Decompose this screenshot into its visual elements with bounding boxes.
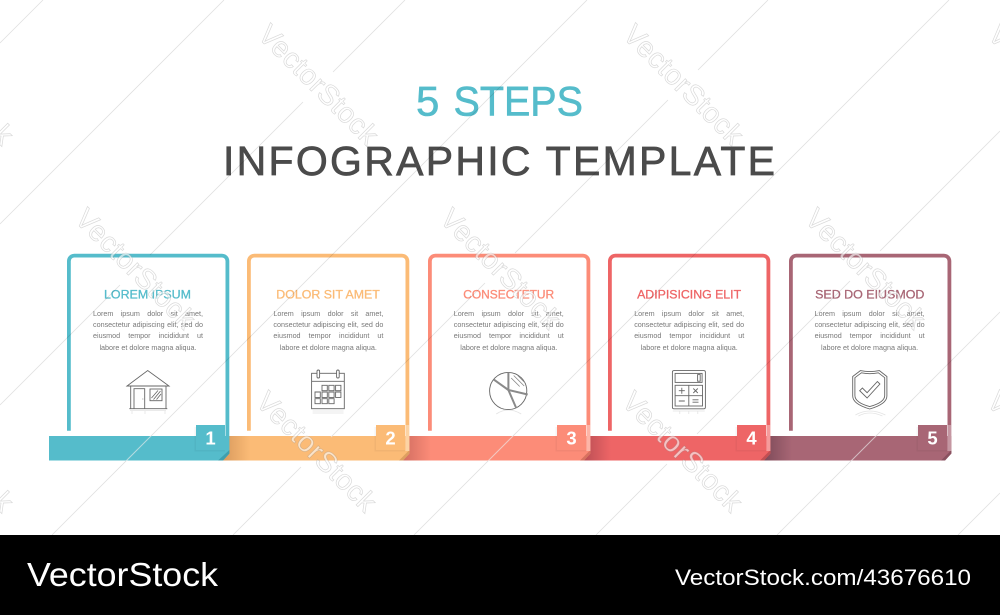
body text 4: Lorem ipsum dolor sit amet, xyxy=(634,309,744,318)
icon: shield with check xyxy=(852,371,886,416)
title line: infographic template: INFOGRAPHIC TEMPLATE xyxy=(223,138,775,184)
icon: calendar xyxy=(312,370,345,413)
heading 4: ADIPISICING ELIT xyxy=(637,288,742,302)
heading 1: LOREM IPSUM xyxy=(104,288,191,302)
ribbon band 4 xyxy=(583,436,771,460)
number badge 5: 5 xyxy=(927,427,937,448)
body text 5 xyxy=(814,309,925,352)
panel: step 3 consectetur xyxy=(403,254,590,460)
footer bar xyxy=(0,535,1000,615)
card frame 4 xyxy=(610,256,769,431)
body text 2 xyxy=(273,309,384,352)
ribbon band 1 xyxy=(49,436,229,460)
heading 2: DOLOR SIT AMET xyxy=(277,288,381,302)
body text 2: eiusmod tempor incididunt ut xyxy=(273,331,383,340)
title line: 5 steps: 5 xyxy=(416,78,439,124)
number badge 4: 4 xyxy=(747,427,758,448)
panel: step 5 sed do eiusmod xyxy=(764,254,952,460)
icon: pie chart xyxy=(489,372,527,414)
panel: step 1 lorem ipsum xyxy=(49,254,230,460)
panel: step 4 adipisicing elit xyxy=(584,254,770,460)
body text 5: labore et dolore magna aliqua. xyxy=(821,343,918,352)
body text 5: Lorem ipsum dolor sit amet, xyxy=(815,309,925,318)
title line: 5 steps: STEPS xyxy=(454,78,583,124)
number badge 3 xyxy=(555,425,586,452)
body text 4: consectetur adipiscing elit, sed do xyxy=(634,320,744,329)
number badge 4 xyxy=(736,425,766,452)
card frame 3 xyxy=(430,256,588,431)
card frame 2 xyxy=(249,256,408,431)
body text 4: eiusmod tempor incididunt ut xyxy=(634,331,744,340)
footer image id: VectorStock.com/43676610 xyxy=(675,565,971,590)
body text 2: Lorem ipsum dolor sit amet, xyxy=(273,309,383,318)
icon: house xyxy=(127,370,169,414)
body text 3: labore et dolore magna aliqua. xyxy=(460,343,557,352)
body text 2: consectetur adipiscing elit, sed do xyxy=(273,320,383,329)
ribbon band 5 xyxy=(764,436,951,460)
heading 5: SED DO EIUSMOD xyxy=(815,288,924,302)
footer logo text: VectorStock xyxy=(27,556,219,593)
heading 3: CONSECTETUR xyxy=(463,288,554,302)
card frame 5 xyxy=(790,256,949,431)
ribbon band 3 xyxy=(403,436,590,460)
body text 1: consectetur adipiscing elit, sed do xyxy=(93,320,203,329)
body text 1: Lorem ipsum dolor sit amet, xyxy=(93,309,203,318)
body text 1: labore et dolore magna aliqua. xyxy=(99,343,197,352)
number badge 1 xyxy=(194,425,225,452)
number badge 2 xyxy=(375,425,405,452)
panel: step 2 dolor sit amet xyxy=(223,254,410,460)
body text 1: eiusmod tempor incididunt ut xyxy=(93,331,203,340)
number badge 5 xyxy=(916,425,947,452)
body text 4: labore et dolore magna aliqua. xyxy=(641,343,738,352)
ribbon band 2 xyxy=(222,436,410,460)
body text 3: Lorem ipsum dolor sit amet, xyxy=(454,309,564,318)
number badge 2: 2 xyxy=(386,427,396,448)
body text 3: eiusmod tempor incididunt ut xyxy=(454,331,564,340)
title xyxy=(223,78,775,184)
body text 4 xyxy=(634,309,744,352)
body text 2: labore et dolore magna aliqua. xyxy=(280,343,377,352)
body text 3 xyxy=(454,309,564,352)
number badge 1: 1 xyxy=(205,427,216,448)
icon: calculator xyxy=(673,371,706,414)
body text 5: eiusmod tempor incididunt ut xyxy=(815,331,925,340)
body text 3: consectetur adipiscing elit, sed do xyxy=(454,320,564,329)
body text 5: consectetur adipiscing elit, sed do xyxy=(815,320,925,329)
number badge 3: 3 xyxy=(566,427,576,448)
body text 1 xyxy=(93,309,203,352)
card frame 1 xyxy=(69,256,227,440)
